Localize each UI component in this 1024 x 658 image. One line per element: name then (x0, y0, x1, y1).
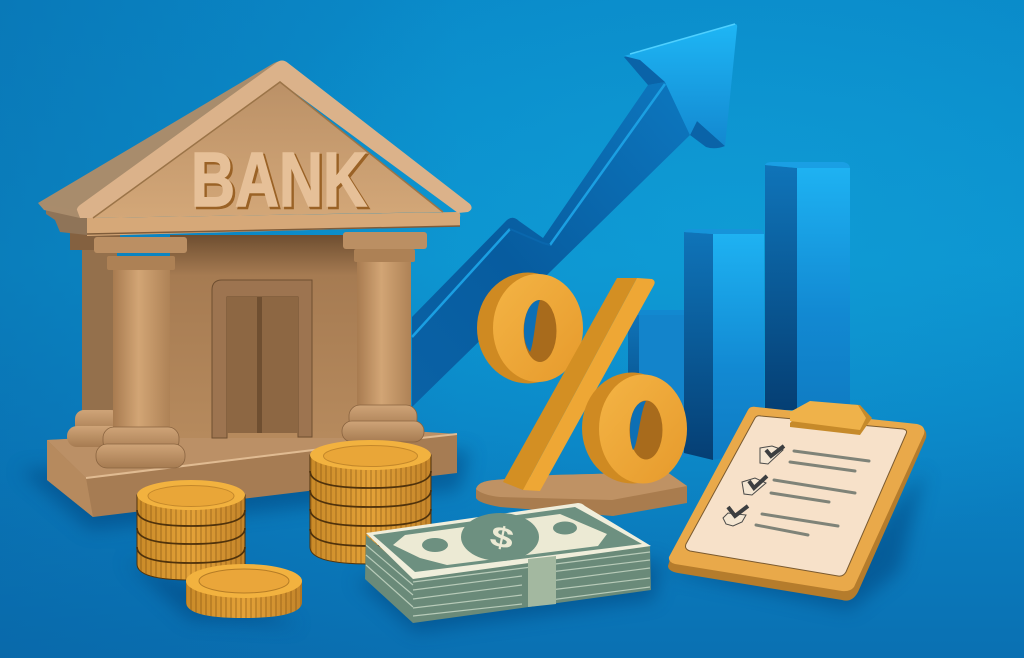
BANK lettering: BANK (191, 137, 367, 223)
lower circle (582, 372, 687, 484)
loose coin (186, 564, 302, 618)
bank building (38, 60, 472, 517)
clip (790, 401, 872, 435)
ground shadows (20, 450, 925, 632)
wall (170, 235, 360, 438)
bar 3 (765, 162, 850, 411)
right column (342, 232, 427, 442)
front left column (94, 237, 187, 468)
stand (476, 472, 687, 516)
coin stack: left (137, 480, 245, 580)
cash sides (365, 535, 651, 623)
checklist lines (756, 451, 869, 535)
bill medallion (461, 513, 539, 561)
plinth (47, 425, 457, 517)
rising arrow (412, 24, 737, 407)
bar 1 (628, 310, 690, 458)
bar 2 (684, 229, 764, 460)
arrow head (624, 24, 737, 146)
percent sign on stand (476, 272, 687, 516)
cash top bill (366, 503, 651, 579)
door (212, 280, 312, 438)
coin stack: right (310, 440, 431, 564)
slash (503, 278, 655, 491)
bill medallion: $ (487, 519, 517, 556)
check marks (723, 446, 784, 526)
bar chart (628, 162, 850, 460)
board (668, 407, 926, 601)
upper circle (477, 272, 583, 384)
clipboard checklist (668, 401, 926, 601)
back column (67, 233, 122, 447)
arrow shaft (412, 82, 690, 407)
paper band (528, 556, 556, 607)
arrow head barbs (624, 50, 665, 85)
stack of cash (365, 503, 651, 623)
BANK lettering: BANK (193, 139, 369, 225)
roof (38, 60, 472, 218)
entablature (46, 208, 460, 236)
paper (686, 416, 907, 576)
